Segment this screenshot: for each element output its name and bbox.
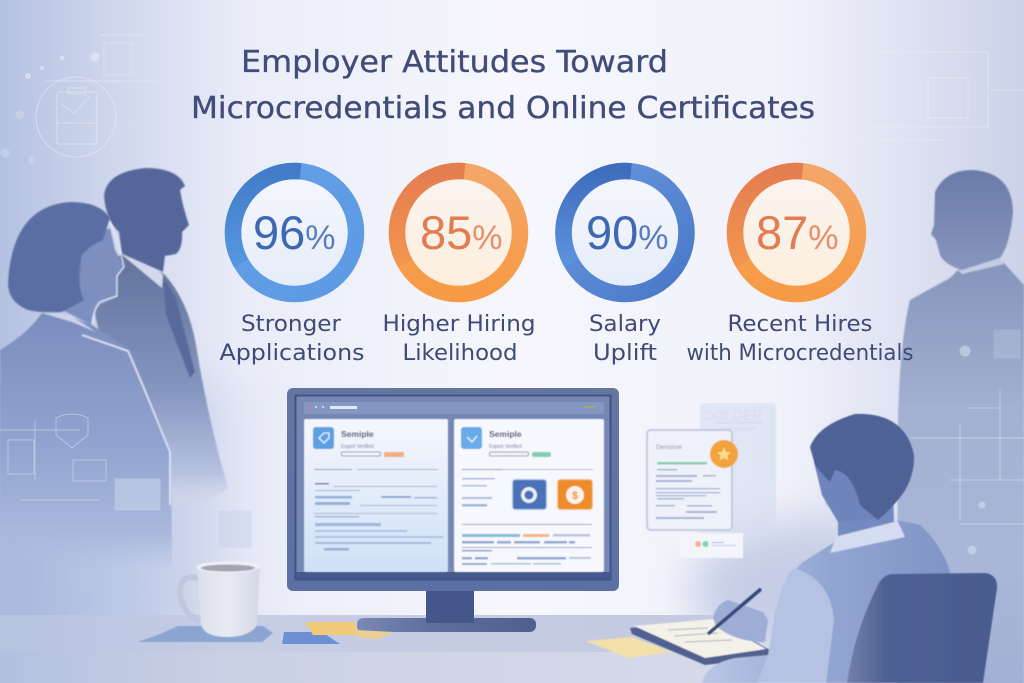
decorative clipboard icon: top left — [1, 35, 158, 163]
label: higher hiring likelihood: Higher Hiring — [382, 312, 536, 337]
floating certificate card: Dersonne — [656, 445, 683, 451]
right document panel: Expert Verified — [489, 444, 522, 450]
woman face — [62, 228, 124, 325]
shirt — [702, 520, 950, 683]
donut: 87%: 87% — [756, 206, 839, 259]
figure: seated man — [586, 414, 997, 683]
floating certificate card — [647, 403, 776, 558]
faint circuit overlay: right — [910, 330, 1024, 554]
monitor — [287, 388, 619, 632]
coaster — [138, 626, 273, 642]
browser bar — [304, 402, 604, 414]
woman outline — [82, 335, 170, 505]
card behind — [700, 403, 776, 533]
left panel text lines — [314, 469, 443, 550]
card front — [647, 430, 732, 530]
man head — [104, 168, 189, 272]
label: stronger applications: Stronger — [241, 312, 342, 337]
right document panel: Semiple — [489, 429, 522, 439]
decorative circuit lines: top right — [760, 52, 1024, 140]
mug body — [197, 566, 260, 637]
left document panel: Semiple — [341, 429, 374, 439]
icon: star medal — [710, 440, 738, 468]
icon: orange badge — [558, 480, 592, 510]
label: higher hiring likelihood — [382, 312, 536, 366]
collar — [830, 520, 905, 553]
title: Microcredentials and Online Certificates — [191, 91, 815, 126]
hair — [810, 414, 914, 520]
sticky notes — [282, 622, 394, 644]
label: recent hires with microcredentials: Recent Hires — [728, 312, 872, 337]
yellow folder — [586, 637, 672, 658]
mug rim — [196, 562, 260, 572]
desk — [0, 615, 760, 683]
right man collar — [958, 258, 1004, 274]
mug handle — [180, 577, 199, 621]
figure: woman, front left — [0, 202, 172, 570]
label: stronger applications: Applications — [220, 341, 364, 366]
label: salary uplift: Salary — [589, 312, 661, 337]
hand and pen — [708, 589, 768, 642]
title — [191, 45, 815, 126]
icon: check — [461, 427, 482, 449]
label: salary uplift — [589, 312, 661, 366]
faint interface sketches over left figure — [0, 414, 252, 548]
monitor frame — [287, 388, 619, 591]
right man head — [931, 170, 1013, 270]
label: higher hiring likelihood: Likelihood — [402, 341, 518, 366]
chair — [847, 573, 997, 683]
donut: 85% — [397, 171, 520, 294]
donut: 90%: 90% — [586, 206, 669, 259]
notepad — [630, 619, 770, 665]
small note — [680, 533, 743, 558]
right document panel — [454, 419, 604, 572]
left document panel — [304, 419, 448, 572]
right panel text lines — [462, 469, 593, 565]
monitor stand — [357, 590, 536, 632]
face — [814, 455, 885, 522]
card behind: DOLDER — [704, 407, 762, 423]
man tie — [163, 277, 195, 378]
donut: 96%: 96% — [253, 206, 336, 259]
icon: tag — [313, 427, 334, 449]
label: recent hires with microcredentials — [686, 312, 914, 366]
donut: 85%: 85% — [420, 206, 503, 259]
icon: orange badge: $ — [572, 490, 578, 502]
donut: 87% — [735, 171, 858, 294]
donut: 90% — [563, 171, 686, 294]
sleeve fold — [757, 568, 834, 683]
left document panel: Expert Verified — [341, 444, 374, 450]
donut: 96% — [233, 171, 356, 294]
ear — [824, 481, 834, 507]
title: Employer Attitudes Toward — [241, 45, 668, 80]
woman collar — [42, 313, 96, 332]
label: recent hires with microcredentials: with Microcredentials — [686, 341, 914, 366]
figure: man in suit, right — [897, 170, 1024, 683]
woman hair — [8, 202, 110, 312]
icon: blue badge — [512, 480, 546, 510]
neck — [838, 490, 894, 536]
label: salary uplift: Uplift — [593, 341, 657, 366]
figure: man in suit, back left — [92, 168, 228, 506]
man collar — [120, 250, 163, 288]
label: stronger applications — [220, 312, 364, 366]
woman face outline — [92, 222, 124, 324]
icon: coffee mug — [138, 562, 273, 642]
